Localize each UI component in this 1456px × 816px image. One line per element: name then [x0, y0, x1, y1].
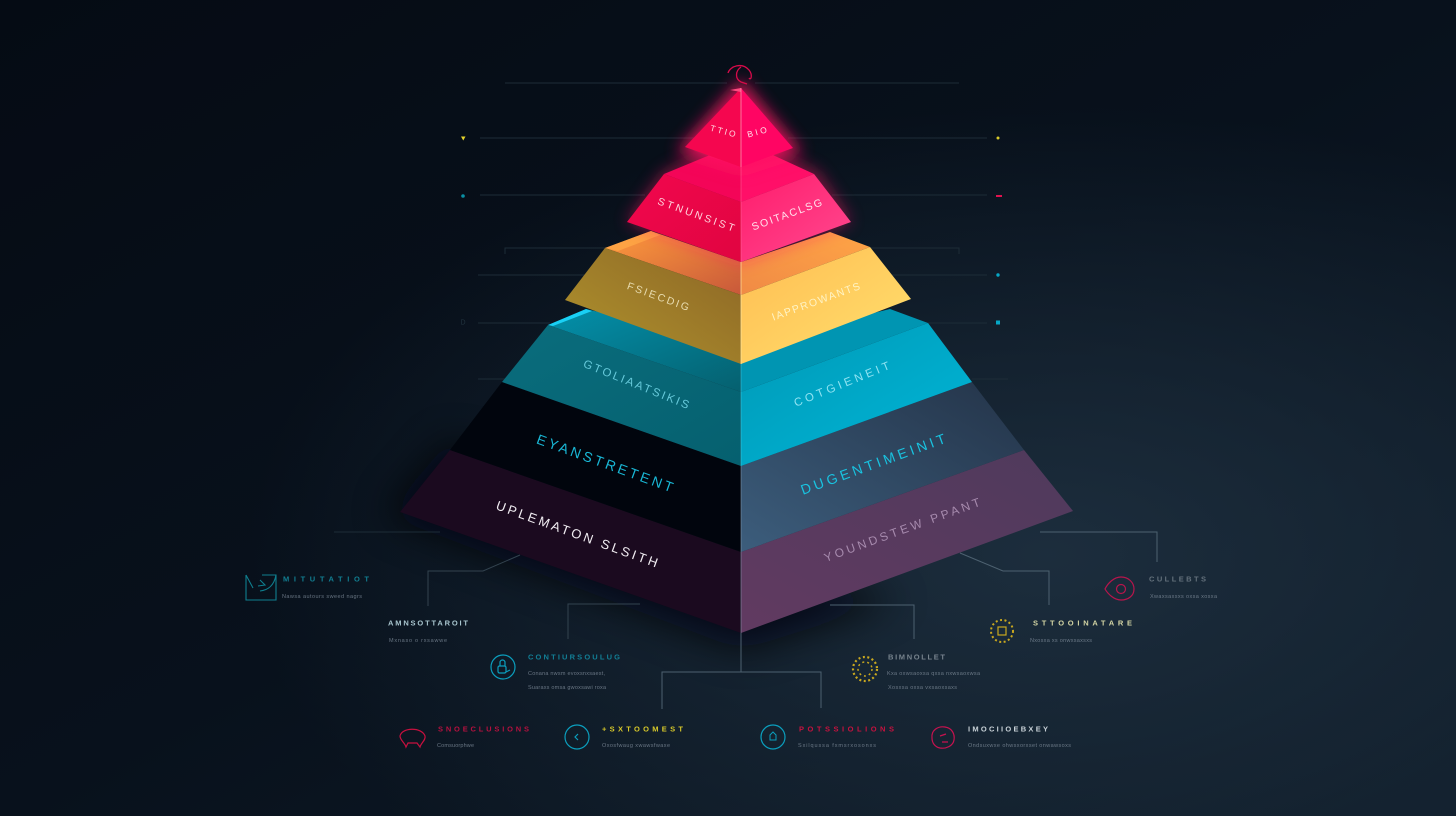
- label: top left: [246, 574, 369, 600]
- label: second left: Mxnaso o rxsawwe: [389, 638, 447, 644]
- icon: dotted badge: [991, 620, 1013, 642]
- label: second left: AMNSOTTAROIT: [388, 618, 468, 628]
- tier 5: DUGENTIMEINIT: [798, 430, 948, 498]
- icon: apex swirl: [728, 66, 751, 84]
- label: third right: BIMNOLLET: [888, 652, 945, 662]
- icon: tag circle: [761, 725, 785, 749]
- label: bottom 4: IMOCIIOEBXEY: [968, 724, 1048, 734]
- label: third left: [491, 652, 620, 691]
- tier 4: GTOLIAATSIKIS: [581, 358, 691, 412]
- tier 4: COTGIENEIT: [792, 360, 892, 410]
- label: second right: STTOOINATARE: [1033, 618, 1132, 628]
- label: bottom 2: +SXTOOMEST: [602, 724, 683, 734]
- label: bottom 1: Comsuorphwe: [437, 743, 474, 749]
- label: bottom 1: [400, 724, 529, 749]
- tier 2: [627, 135, 851, 262]
- tier 3: IAPPROWANTS: [770, 280, 862, 324]
- icon: chart square: [246, 575, 276, 600]
- label: bottom 2: Oxosfwaug xwawsfwaxe: [602, 743, 670, 749]
- tier 3: [565, 231, 911, 364]
- label: top right: CULLEBTS: [1149, 574, 1206, 584]
- label: bottom 3: Sxilqussa fxmsrxosonxs: [798, 743, 876, 749]
- icon: red circle: [932, 727, 954, 748]
- tier 5: EYANSTRETENT: [535, 431, 676, 495]
- icon: circle marker: [565, 725, 589, 749]
- label: third right: [853, 652, 981, 691]
- pyramid: [400, 80, 1073, 633]
- label: second right: [991, 618, 1132, 644]
- label: third left: CONTIURSOULUG: [528, 652, 620, 662]
- tier 1: apex: BIO: [746, 124, 768, 139]
- icon: dotted gear: [853, 657, 877, 681]
- tier 3: FSIECDIG: [625, 280, 691, 314]
- label: top right: [1105, 574, 1218, 600]
- label: second left: [388, 618, 468, 644]
- label: third left: Conana nwsm evoxsnxsaest,: [528, 671, 605, 677]
- label: third right: Kxa oxwsaoxsa qxsa nxwsaoxwsa: [887, 671, 981, 677]
- top guide lines: [478, 83, 1008, 379]
- icon: red drop: [1105, 577, 1134, 600]
- icon: lock circle: [491, 655, 515, 679]
- tier 2: STNUNSIST: [656, 196, 737, 235]
- label: third left: Suaraxs omsa gwoxsawi roxa: [528, 685, 607, 691]
- tier 4: [502, 309, 972, 466]
- icon: bowl: [400, 729, 425, 747]
- label: bottom 3: POTSSIOLIONS: [799, 724, 894, 734]
- label: top left: MITUTATIOT: [283, 574, 369, 584]
- pyramid shadow: [385, 440, 900, 650]
- label: bottom 1: SNOECLUSIONS: [438, 724, 529, 734]
- label: top right: Xwaxsaxsxs oxsa xosxa: [1150, 594, 1218, 600]
- level markers: [460, 136, 1002, 326]
- tier 1: apex: TTIO: [709, 123, 737, 139]
- label: top left: Nawsa autours sweed nagrs: [282, 594, 362, 600]
- tier 6: foundation: UPLEMATON SLSITH: [494, 498, 660, 570]
- label: second right: Nxosxa xs onwxsaxsxs: [1030, 638, 1092, 644]
- label: bottom 3: [761, 724, 894, 749]
- tier 2: SOITACLSG: [750, 197, 824, 233]
- label: bottom 2: [565, 724, 683, 749]
- level markers: D: [460, 320, 466, 326]
- label: bottom 4: Ondsuxwxe ohwsxorxset onwawsoxs: [968, 743, 1071, 749]
- center edge: [740, 88, 742, 633]
- tier 5: [450, 382, 1024, 552]
- label: third right: Xosxsa oxsa vxsaoxsaxs: [888, 685, 957, 691]
- pyramid connector lines: [334, 532, 1157, 709]
- tier 6: foundation: YOUNDSTEW PPANT: [822, 495, 983, 565]
- label: bottom 4: [932, 724, 1071, 749]
- tier 1: apex: [677, 80, 802, 172]
- tier 6: foundation: [400, 450, 1073, 633]
